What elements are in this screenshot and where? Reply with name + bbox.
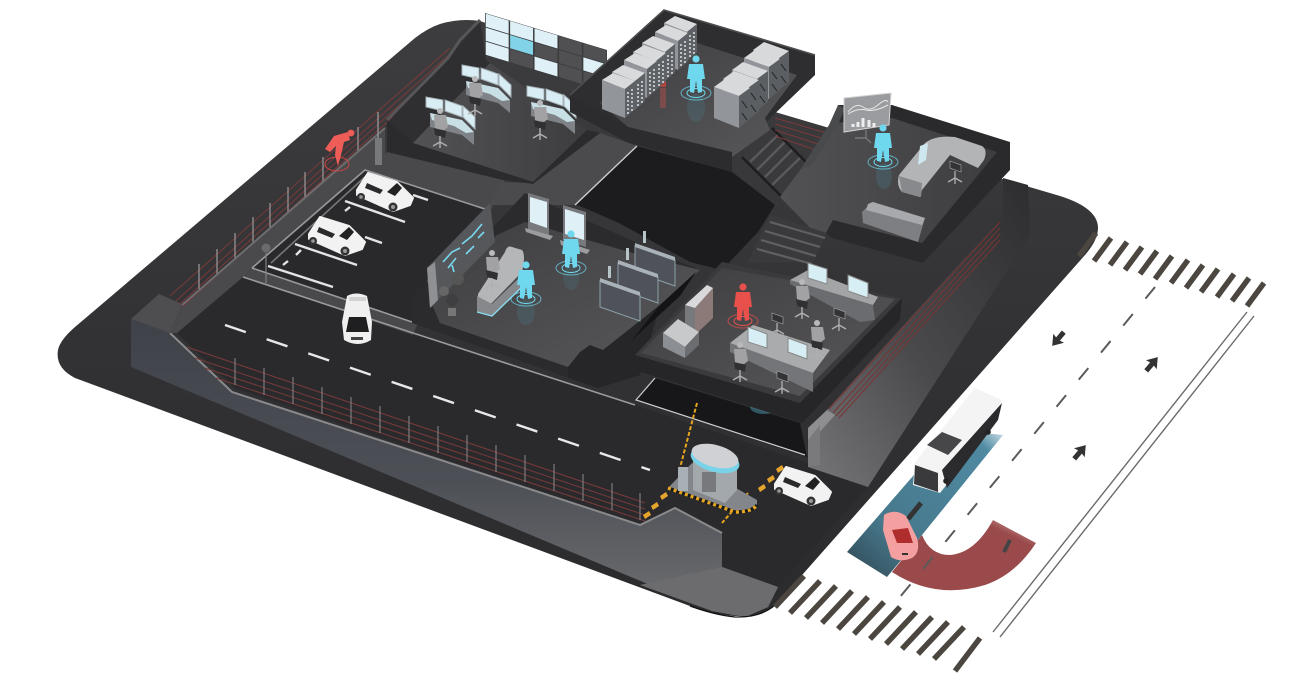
map wall [427, 203, 495, 308]
upper perimeter fence [170, 48, 450, 306]
crosswalk: bottom [775, 576, 980, 671]
parking lot [243, 150, 635, 405]
car: parked white 1 [357, 173, 413, 212]
plants [439, 273, 464, 316]
reception desk [898, 137, 986, 197]
chart board [844, 93, 891, 143]
upper stairs [742, 128, 812, 197]
person: lobby visitor [556, 230, 586, 290]
front fence [187, 347, 645, 521]
road surface [177, 277, 868, 587]
person: red intruder at fence [325, 130, 354, 171]
car: white on road [342, 294, 372, 344]
red turning lane [892, 520, 1036, 590]
ground platform [58, 20, 1098, 616]
server racks left [602, 16, 697, 118]
cabinet [685, 285, 713, 335]
person: conference room [868, 124, 898, 189]
reception counter [477, 247, 524, 316]
road centre dashes [225, 325, 650, 470]
person: server room guard [681, 55, 711, 122]
crosswalk: top [1079, 233, 1264, 306]
front retaining wall [131, 294, 780, 617]
desk lower [730, 313, 830, 394]
printer [663, 319, 699, 358]
car: parked white 2 [309, 217, 365, 256]
area under office [636, 378, 807, 457]
panel: control room [387, 13, 607, 184]
reception staff [485, 250, 500, 290]
office chair [948, 161, 962, 184]
panel: right retaining wall [808, 178, 1030, 487]
person: red intruder in office [728, 283, 758, 328]
kiosk 1 [525, 193, 553, 240]
panel: lobby [412, 193, 700, 388]
car: white near gate [775, 467, 831, 506]
panel: conference room [780, 93, 1010, 263]
car: pink [883, 512, 918, 560]
lower stairs [747, 215, 827, 264]
upper side strip [170, 128, 385, 333]
video wall [485, 13, 607, 92]
console 1 [426, 97, 475, 148]
road edge double line [993, 312, 1254, 637]
panel: gate booth [643, 403, 784, 523]
bus [913, 388, 1002, 493]
lane centre dashes [900, 287, 1155, 597]
icon: parking sign and post [262, 112, 382, 283]
rear fence segment [775, 118, 830, 150]
sofa [862, 202, 925, 242]
console 3 [527, 86, 576, 140]
blue bus lane [847, 430, 1003, 577]
void area [575, 146, 775, 270]
desk upper [790, 263, 878, 331]
server cabinets right [714, 42, 789, 128]
person: reception visitor [511, 261, 541, 325]
security gates [600, 231, 675, 321]
lane arrow markings [908, 328, 1163, 552]
walkway strip [490, 133, 637, 205]
panel: server room [570, 10, 815, 172]
kiosk 2 [560, 205, 590, 254]
console 2 [462, 65, 511, 116]
panel: office [635, 262, 902, 423]
